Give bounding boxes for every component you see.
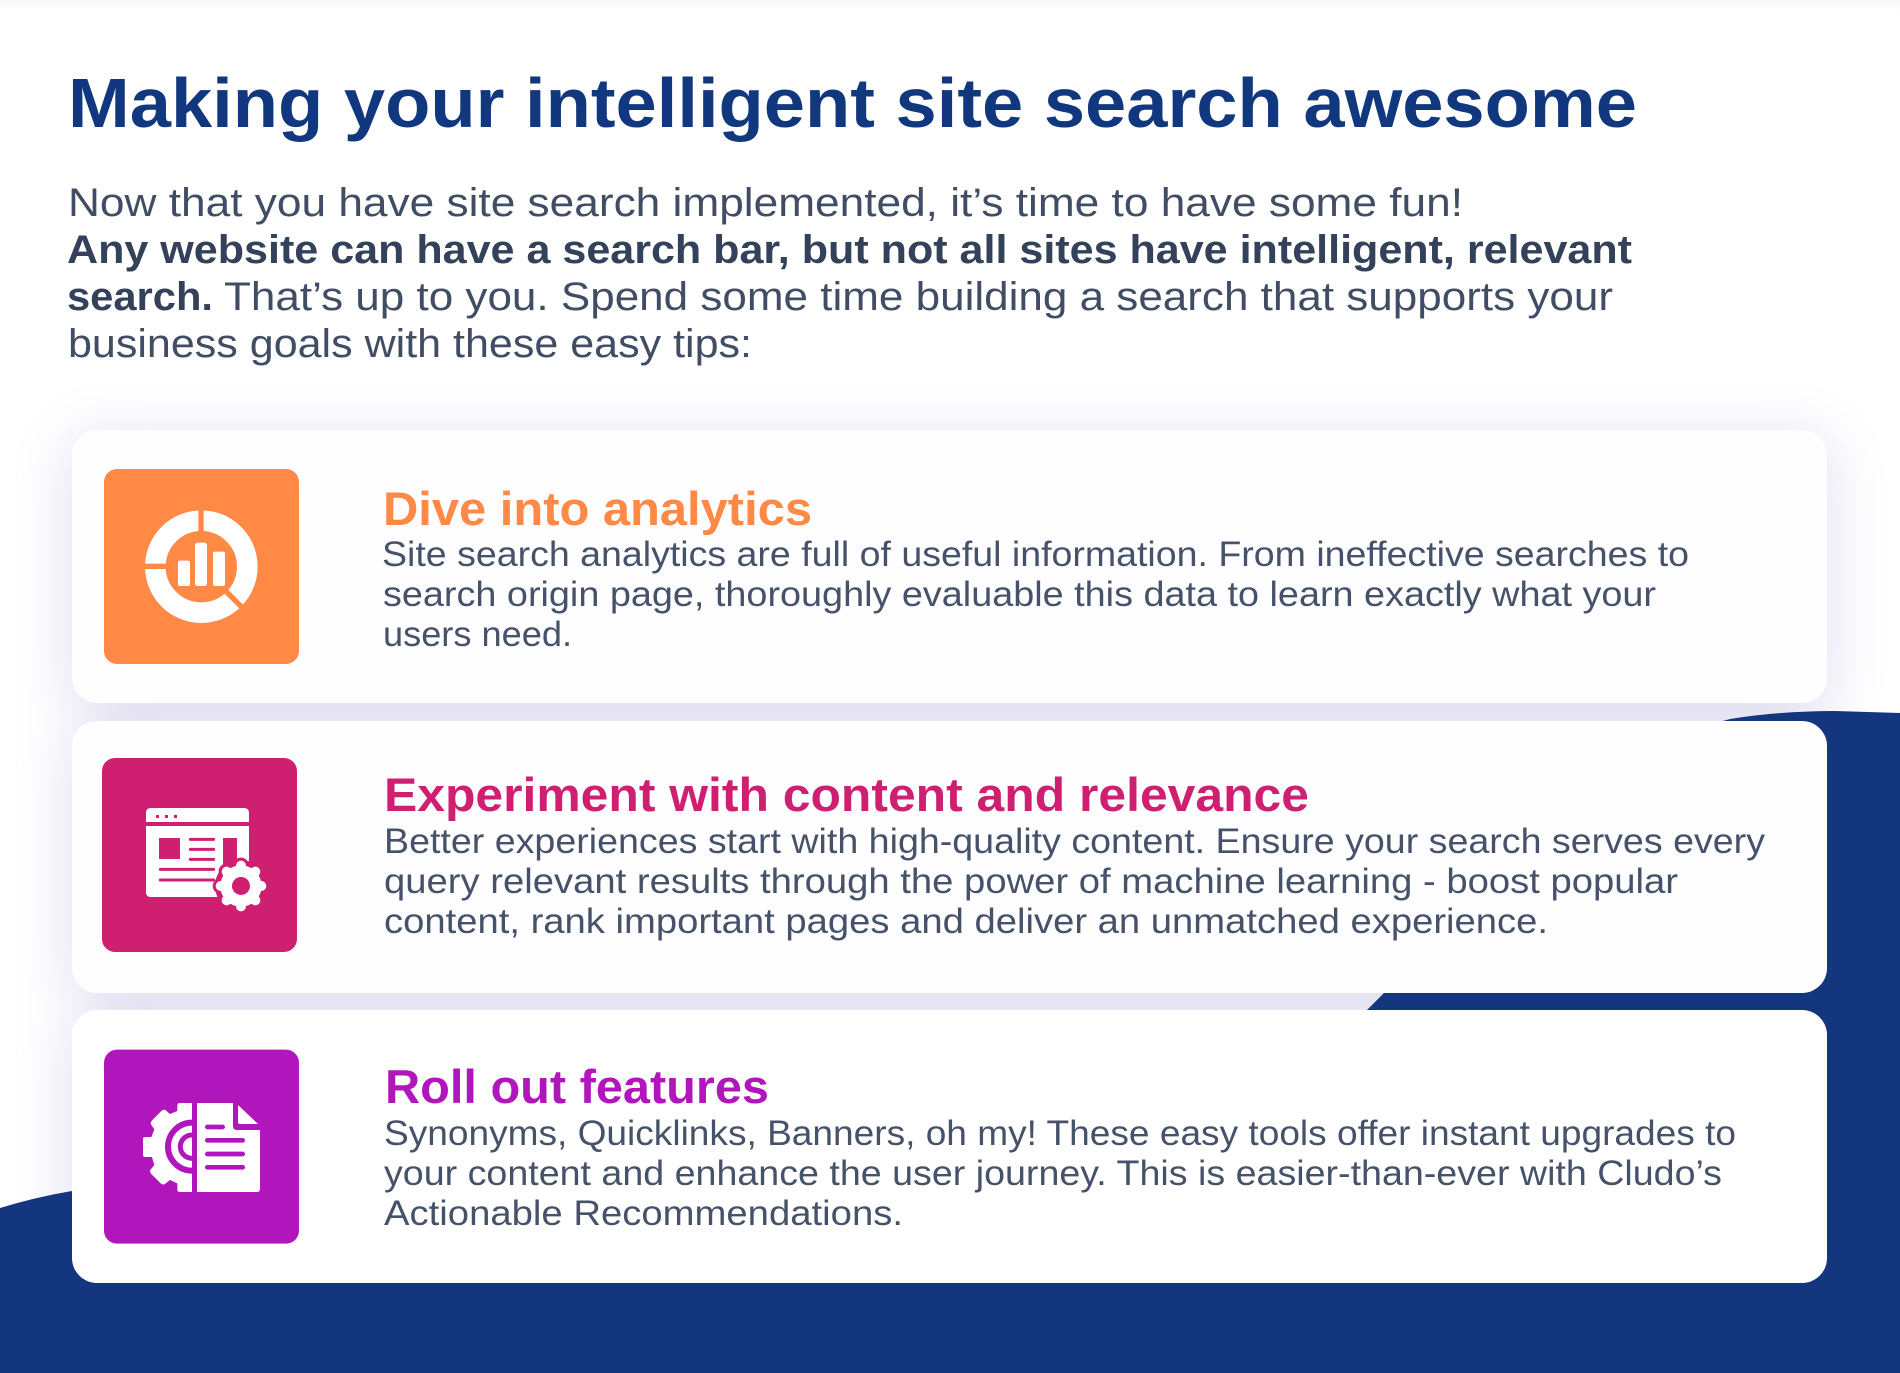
body text: analytics: Site search analytics are full of useful information. From ineffective searches to [382,535,1689,574]
body text: analytics [382,535,1689,654]
background wave [0,711,1900,1373]
intro paragraph: Now that you have site search implemented, it’s time to have some fun! [68,181,1463,225]
body text: experiment [384,822,1766,941]
body text: roll out features: Actionable Recommendations. [384,1194,903,1233]
heading: dive into analytics: Dive into analytics [383,482,812,535]
panel: experiment with content and relevance [72,721,1827,993]
heading: experiment with content and relevance: Experiment with content and relevance [384,768,1309,821]
panel: roll out features [72,1010,1827,1283]
icon: web page with gear [102,758,297,952]
icon: gear and document [104,1050,299,1244]
heading: roll out features: Roll out features [385,1060,769,1113]
intro paragraph [67,181,1632,366]
body text: roll out features: Synonyms, Quicklinks, Banners, oh my! These easy tools offer instant upgrades to [384,1114,1736,1153]
body text: roll out features: your content and enhance the user journey. This is easier-than-ever with Cludo’s [384,1154,1722,1193]
intro paragraph: That’s up to you. Spend some time building a search that supports your [224,275,1613,319]
intro paragraph: business goals with these easy tips: [68,322,752,366]
body text: experiment: Better experiences start with high-quality content. Ensure your search serves every [384,822,1766,861]
body text: experiment: query relevant results through the power of machine learning - boost popular [384,862,1678,901]
body text: analytics: users need. [383,615,572,654]
intro paragraph: search. [67,275,213,319]
panel: dive into analytics [72,430,1827,703]
icon: analytics magnifier [104,469,299,664]
intro paragraph: Any website can have a search bar, but not all sites have intelligent, relevant [67,228,1632,272]
title: Making your intelligent site search awesome [68,64,1637,142]
body text: analytics: search origin page, thoroughly evaluable this data to learn exactly what your [383,575,1656,614]
body text: roll out features [384,1114,1736,1233]
body text: experiment: content, rank important pages and deliver an unmatched experience. [384,902,1548,941]
